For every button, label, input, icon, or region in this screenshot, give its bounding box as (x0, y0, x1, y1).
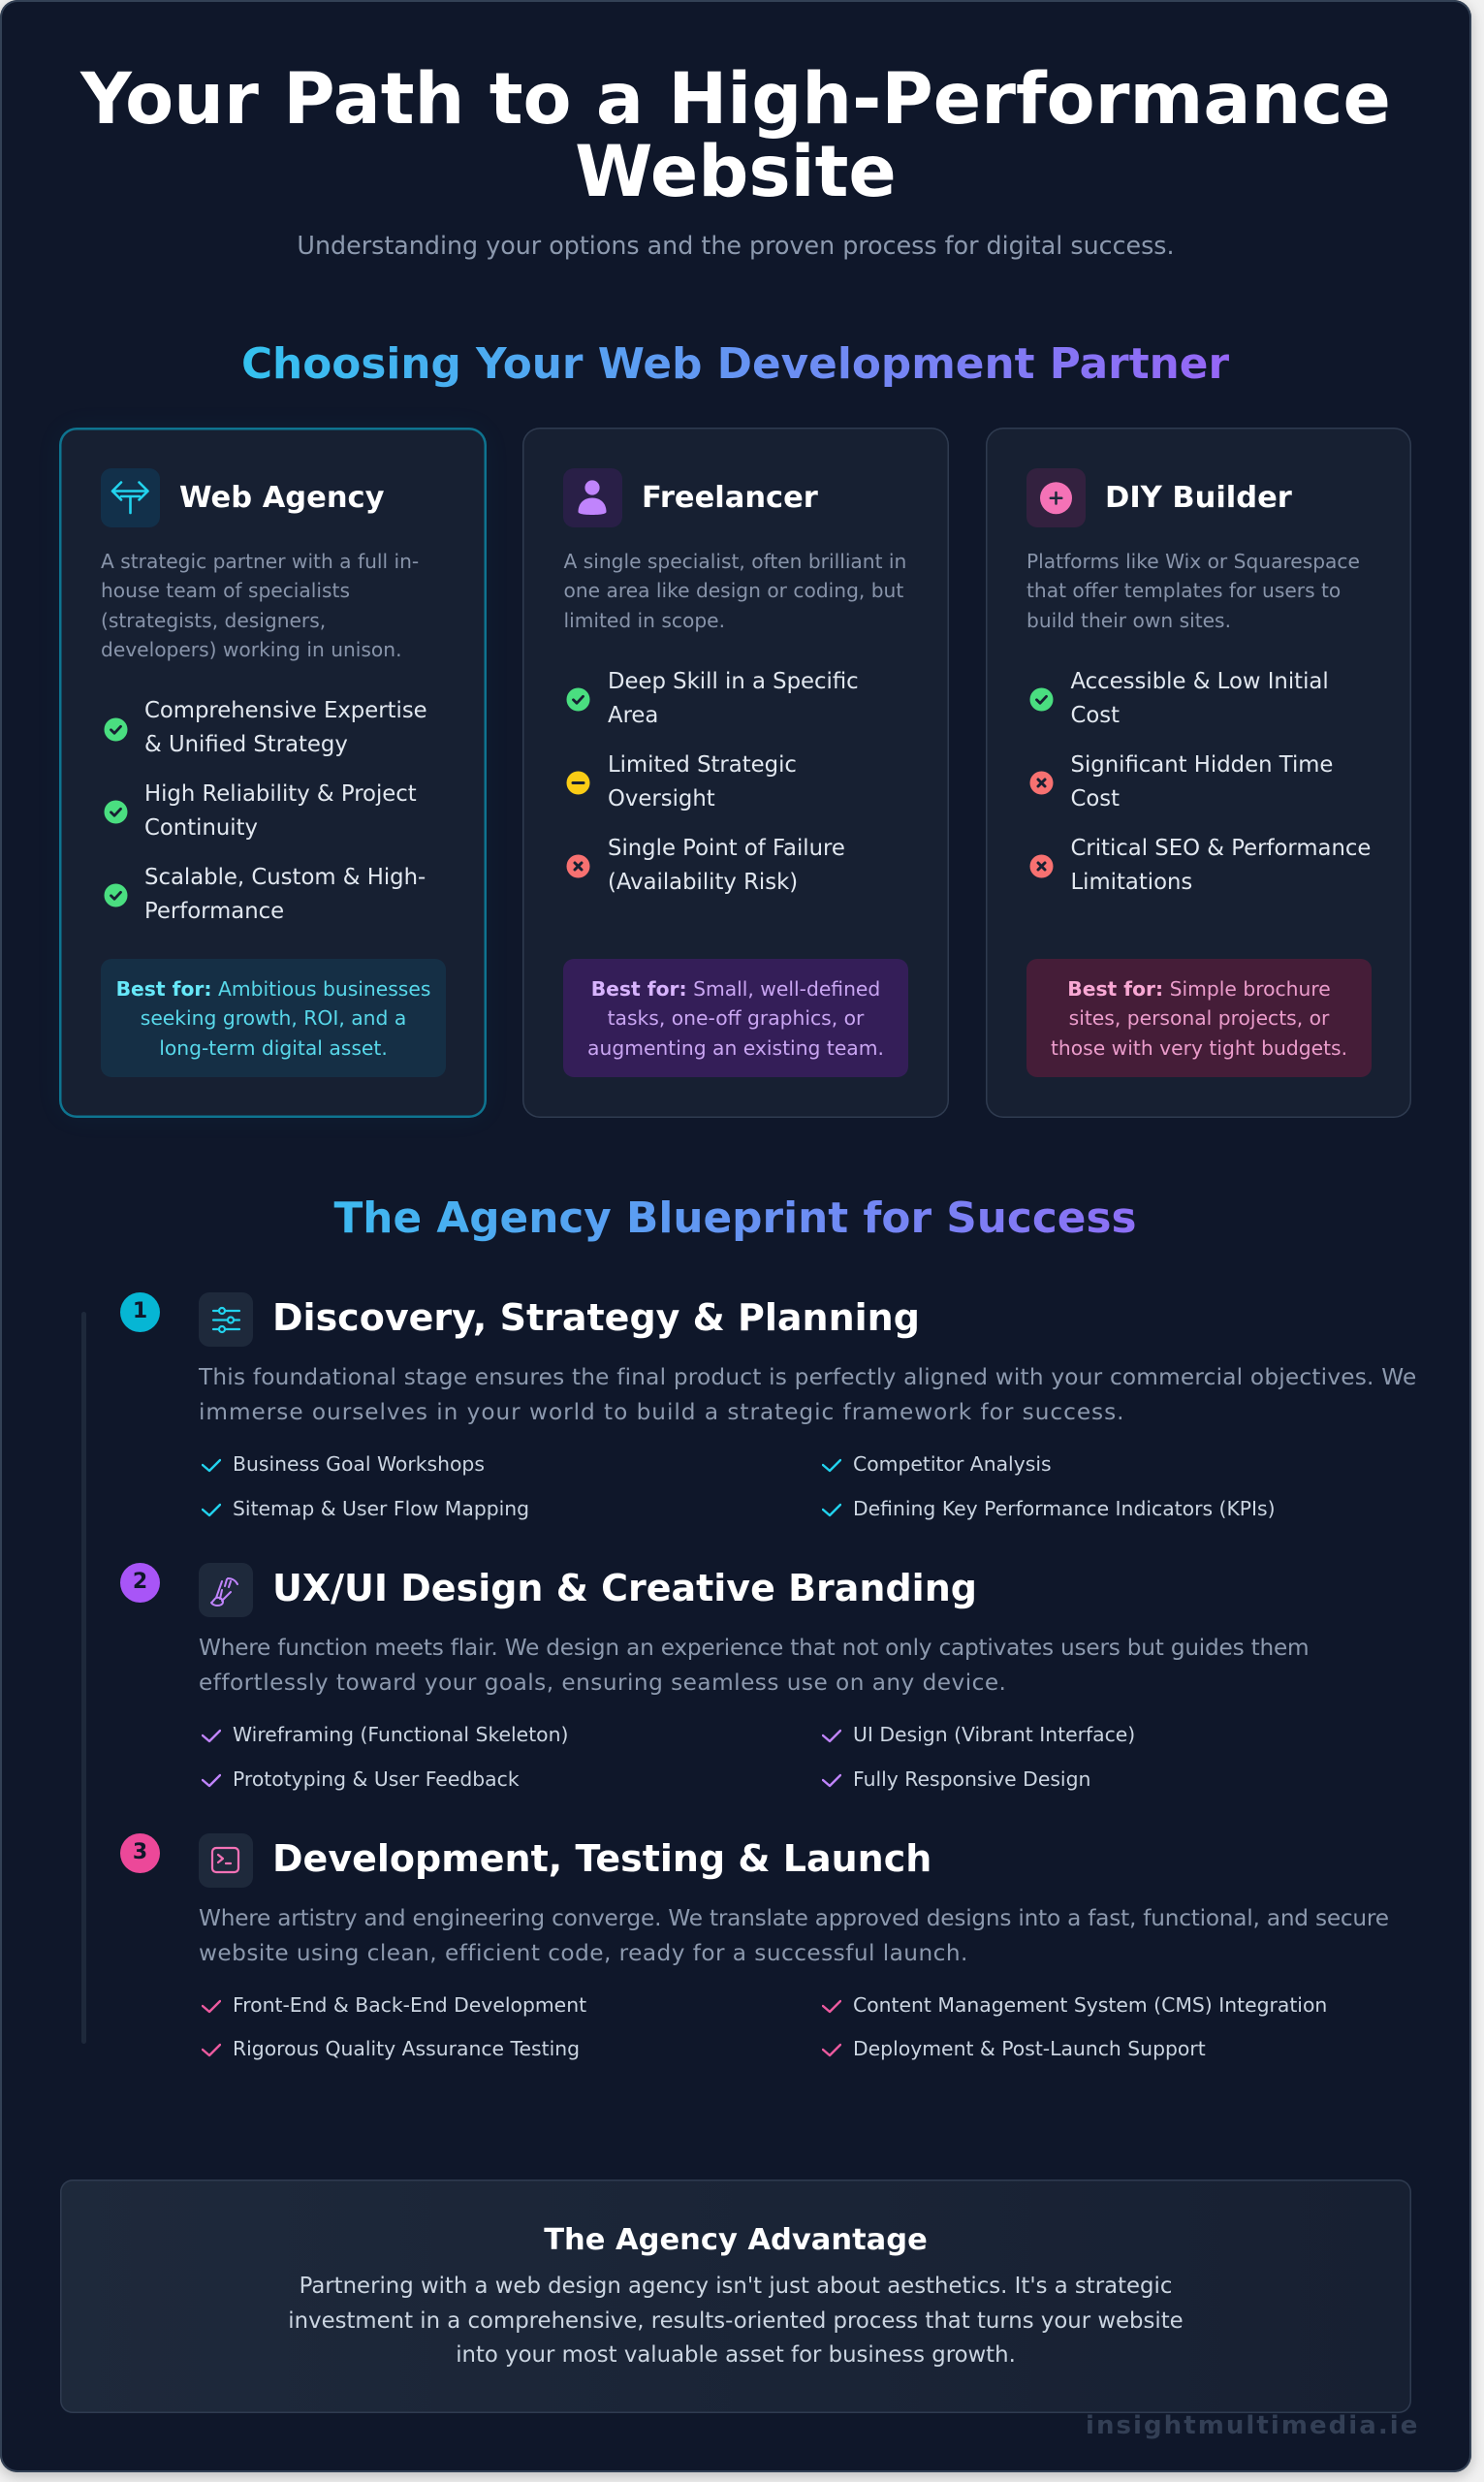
icon: cross (566, 855, 589, 878)
icon: minus (566, 772, 589, 795)
icon: cross (1029, 855, 1053, 878)
callout: best for (563, 959, 908, 1077)
icon: brush (199, 1563, 253, 1617)
list item: Scalable, Custom & High- (144, 865, 426, 890)
heading: choosing your partner: Choosing Your Web Development Partner (241, 339, 1229, 389)
list item: Area (608, 703, 658, 728)
list item: Limited Strategic (608, 752, 797, 778)
step description: Where artistry and engineering converge. We translate approved designs into a fast, functional, and secure (199, 1905, 1389, 1931)
card description (1026, 550, 1360, 632)
number badge: 2 (133, 1570, 147, 1594)
step description (199, 1635, 1309, 1696)
panel: agency advantage (60, 2180, 1411, 2413)
heading: agency blueprint: The Agency Blueprint for Success (333, 1193, 1137, 1243)
list item (1070, 752, 1333, 811)
icon: tick (822, 1999, 841, 2013)
step title: Discovery, Strategy & Planning (272, 1296, 920, 1339)
list item: Cost (1070, 786, 1120, 811)
icon: check (105, 801, 128, 824)
callout: best for: Best for: Small, well-defined (591, 977, 880, 1001)
card title: Freelancer (642, 481, 818, 515)
list item: High Reliability & Project (144, 781, 417, 807)
card description: house team of specialists (101, 579, 350, 602)
step description (199, 1905, 1389, 1966)
icon: tick (822, 1458, 841, 1472)
icon: tick (822, 1503, 841, 1516)
list item: Critical SEO & Performance (1070, 836, 1371, 861)
list item: & Unified Strategy (144, 732, 348, 757)
list item: (Availability Risk) (608, 870, 798, 895)
callout: best for: those with very tight budgets. (1051, 1035, 1347, 1059)
list item: Limitations (1070, 870, 1192, 895)
card description: developers) working in unison. (101, 638, 401, 661)
icon: check (105, 717, 128, 741)
icon: tick (202, 1503, 221, 1516)
icon: check (1029, 688, 1053, 712)
callout: best for (101, 959, 446, 1077)
list item: Performance (144, 899, 284, 924)
card description (101, 550, 419, 661)
panel: freelancer (522, 428, 949, 1118)
icon: sliders (199, 1292, 253, 1347)
icon: signpost arrows (101, 468, 160, 527)
list item (144, 698, 427, 757)
list item: Comprehensive Expertise (144, 698, 427, 723)
panel text (60, 2270, 1411, 2373)
callout: best for: tasks, one-off graphics, or (608, 1006, 864, 1030)
icon: terminal (199, 1833, 253, 1888)
callout: best for: augmenting an existing team. (587, 1035, 884, 1059)
card description: one area like design or coding, but (564, 579, 903, 602)
list item (144, 781, 417, 841)
item: Business Goal Workshops (233, 1452, 485, 1476)
icon: check (105, 884, 128, 907)
step description: immerse ourselves in your world to build a strategic framework for success. (199, 1399, 1124, 1425)
list item (608, 669, 859, 728)
list item: Oversight (608, 786, 715, 811)
item: Deployment & Post-Launch Support (853, 2037, 1206, 2060)
heading: agency blueprint (59, 1193, 1411, 1244)
item: Front-End & Back-End Development (233, 1993, 586, 2017)
item: Defining Key Performance Indicators (KPIs) (853, 1497, 1276, 1520)
item: UI Design (Vibrant Interface) (853, 1723, 1135, 1746)
card description: limited in scope. (564, 609, 725, 632)
card description: A strategic partner with a full in- (101, 550, 419, 573)
title: Website (575, 131, 897, 213)
list item: Single Point of Failure (608, 836, 845, 861)
step 2 (120, 1563, 1309, 1791)
callout: best for (1026, 959, 1372, 1077)
list item (608, 836, 845, 895)
icon: plus circle (1026, 468, 1086, 527)
panel: web agency (59, 428, 487, 1118)
icon: tick (202, 1999, 221, 2013)
title (79, 58, 1391, 213)
icon: tick (202, 2044, 221, 2057)
step description: website using clean, efficient code, ready for a successful launch. (199, 1940, 968, 1966)
card title: DIY Builder (1105, 481, 1292, 515)
item: Content Management System (CMS) Integration (853, 1993, 1327, 2017)
step title: UX/UI Design & Creative Branding (272, 1567, 977, 1609)
number badge (120, 1292, 160, 1332)
step description: effortlessly toward your goals, ensuring seamless use on any device. (199, 1670, 1006, 1696)
icon: tick (822, 2044, 841, 2057)
list item (144, 865, 426, 924)
subtitle: Understanding your options and the proven process for digital success. (297, 231, 1175, 260)
icon: tick (202, 1774, 221, 1788)
panel heading: The Agency Advantage (544, 2223, 928, 2257)
callout: best for: sites, personal projects, or (1069, 1006, 1329, 1030)
panel text: into your most valuable asset for business growth. (456, 2342, 1016, 2368)
step description: This foundational stage ensures the final product is perfectly aligned with your commercial objectives. We (199, 1364, 1416, 1390)
card description: A single specialist, often brilliant in (564, 550, 906, 573)
number badge (120, 1833, 160, 1873)
list item (608, 752, 797, 811)
icon: check (566, 688, 589, 712)
panel text: Partnering with a web design agency isn't just about aesthetics. It's a strategic (300, 2274, 1172, 2299)
card description: Platforms like Wix or Squarespace (1026, 550, 1360, 573)
list item: Cost (1070, 703, 1120, 728)
icon: tick (202, 1730, 221, 1743)
step description (198, 1364, 1416, 1425)
item: Sitemap & User Flow Mapping (233, 1497, 529, 1520)
icon: person (563, 468, 622, 527)
list item: Accessible & Low Initial (1070, 669, 1329, 694)
card description: that offer templates for users to (1026, 579, 1341, 602)
icon: tick (822, 1730, 841, 1743)
card description (564, 550, 906, 632)
item: Competitor Analysis (853, 1452, 1052, 1476)
step 1 (120, 1292, 1416, 1520)
list item: Deep Skill in a Specific (608, 669, 859, 694)
callout: best for: Best for: Simple brochure (1067, 977, 1331, 1001)
list item (1070, 836, 1371, 895)
panel text: investment in a comprehensive, results-oriented process that turns your website (288, 2308, 1184, 2334)
icon: tick (202, 1458, 221, 1472)
step description: Where function meets flair. We design an experience that not only captivates users but guides them (199, 1635, 1309, 1661)
number badge: 1 (133, 1299, 147, 1323)
callout: best for: Best for: Ambitious businesses (116, 977, 430, 1001)
card description: (strategists, designers, (101, 609, 326, 632)
item: Wireframing (Functional Skeleton) (233, 1723, 568, 1746)
list item (1070, 669, 1329, 728)
card title: Web Agency (179, 481, 384, 515)
item: Prototyping & User Feedback (233, 1767, 520, 1791)
step 3 (120, 1833, 1389, 2060)
item: Rigorous Quality Assurance Testing (233, 2037, 580, 2060)
card description: build their own sites. (1026, 609, 1231, 632)
list item: Continuity (144, 815, 258, 841)
number badge (120, 1563, 160, 1603)
title: Your Path to a High-Performance (80, 58, 1391, 140)
step title: Development, Testing & Launch (272, 1837, 931, 1880)
number badge: 3 (133, 1840, 147, 1864)
callout: best for: long-term digital asset. (159, 1035, 388, 1059)
timeline line (81, 1312, 86, 2044)
callout: best for: seeking growth, ROI, and a (141, 1006, 406, 1030)
panel: diy builder (986, 428, 1411, 1118)
icon: tick (822, 1774, 841, 1788)
icon: cross (1029, 772, 1053, 795)
list item: Significant Hidden Time (1070, 752, 1333, 778)
item: Fully Responsive Design (853, 1767, 1090, 1791)
watermark: insightmultimedia.ie (1086, 2411, 1419, 2440)
